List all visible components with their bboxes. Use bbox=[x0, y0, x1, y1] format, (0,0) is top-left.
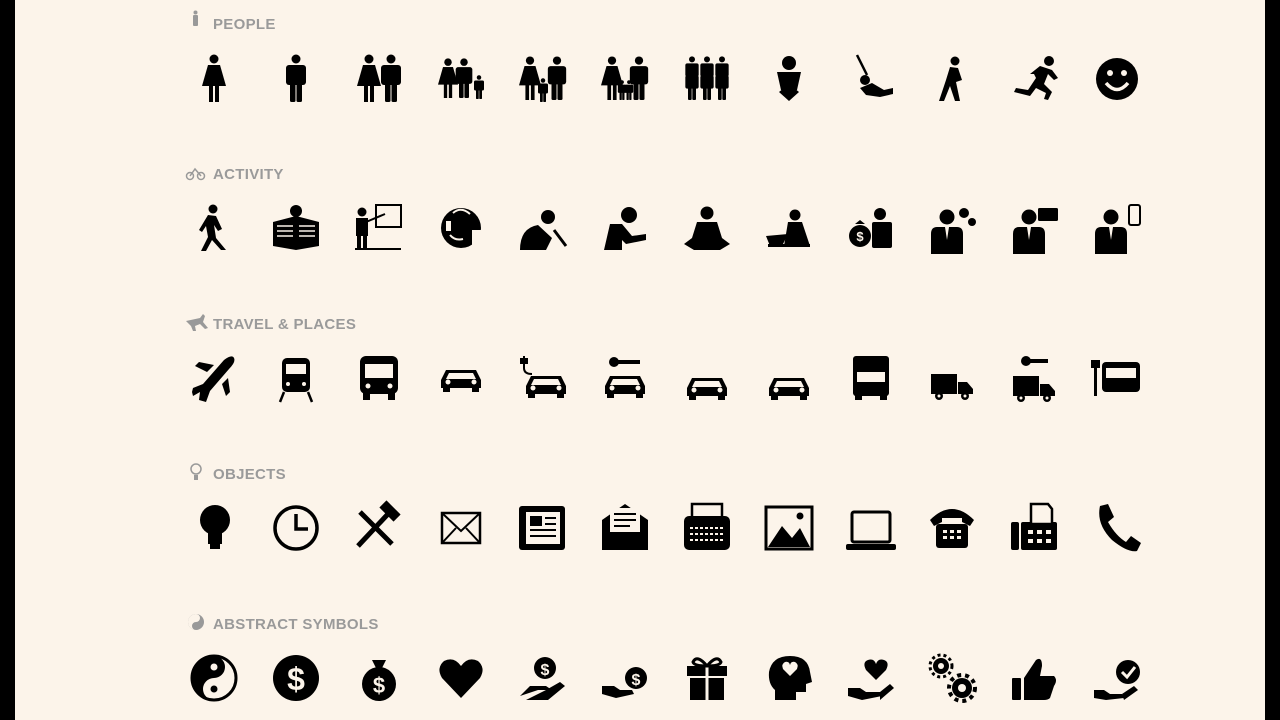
heading: objects bbox=[191, 464, 286, 483]
row: travel icons bbox=[192, 356, 1140, 402]
row: abstract symbols icons: $ bbox=[541, 662, 550, 679]
heading: abstract symbols: ABSTRACT SYMBOLS bbox=[213, 616, 379, 633]
heading: objects: OBJECTS bbox=[213, 466, 286, 483]
row: abstract symbols icons: $ bbox=[373, 673, 385, 698]
left black border bbox=[0, 0, 15, 720]
heading: activity: ACTIVITY bbox=[213, 166, 284, 183]
row: activity icons: $ bbox=[856, 229, 864, 244]
row: people icons bbox=[202, 54, 1138, 102]
row: abstract symbols icons bbox=[192, 655, 1140, 701]
row: abstract symbols icons: $ bbox=[287, 661, 305, 697]
heading: travel & places: TRAVEL & PLACES bbox=[213, 316, 356, 333]
heading: people bbox=[193, 10, 276, 33]
row: objects icons bbox=[200, 500, 1141, 551]
heading: people: PEOPLE bbox=[213, 16, 276, 33]
right black border bbox=[1265, 0, 1280, 720]
row: abstract symbols icons: $ bbox=[632, 672, 641, 689]
row: activity icons bbox=[199, 204, 1140, 254]
